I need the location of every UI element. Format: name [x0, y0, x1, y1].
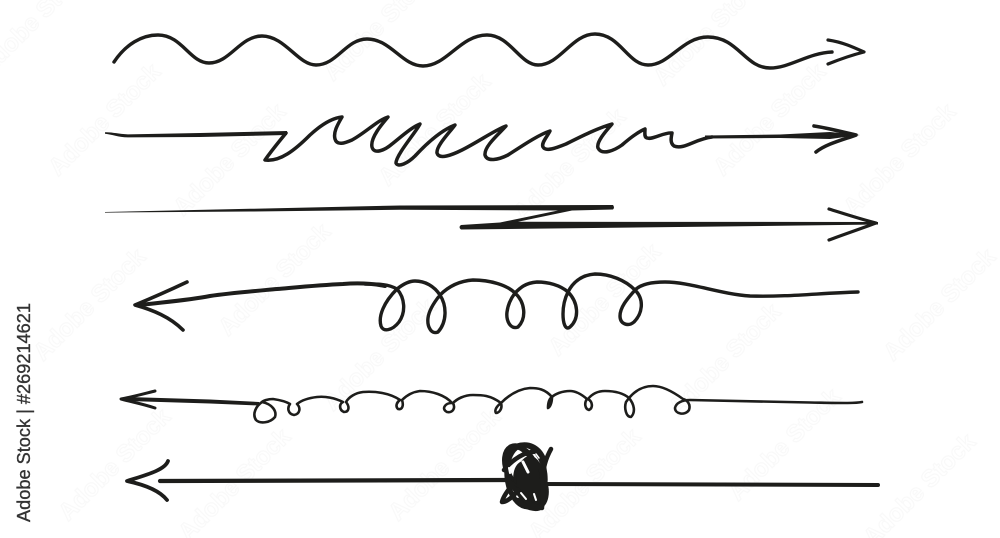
side credit text: Adobe Stock | #269214621 — [14, 303, 34, 522]
watermark pattern: Adobe Stock — [318, 293, 442, 416]
watermark pattern: Adobe Stock — [723, 383, 847, 506]
watermark pattern: Adobe Stock — [373, 68, 497, 191]
watermark pattern: Adobe Stock — [543, 238, 667, 361]
arrow 6: straight line with knot pointing left — [127, 441, 878, 511]
watermark pattern: Adobe Stock — [53, 403, 177, 526]
watermark pattern: Adobe Stock — [708, 58, 832, 181]
watermark pattern: Adobe Stock — [28, 243, 152, 366]
arrow 2: zigzag scribble pointing right — [105, 117, 860, 165]
watermark pattern: Adobe Stock — [663, 298, 787, 421]
watermark pattern: Adobe Stock — [213, 218, 337, 341]
watermark pattern: Adobe Stock — [168, 98, 292, 221]
arrow 5: small loops pointing left — [120, 386, 862, 422]
watermark pattern: Adobe Stock — [383, 403, 507, 526]
watermark pattern: Adobe Stock — [838, 98, 962, 221]
watermark pattern: Adobe Stock — [878, 243, 1000, 366]
arrow 1: wavy line pointing right — [114, 34, 864, 68]
watermark pattern: Adobe Stock — [508, 103, 632, 226]
arrow 4: large loops pointing left — [135, 274, 858, 333]
scribble knot — [499, 441, 552, 511]
arrow 3: broken double line pointing right — [105, 205, 878, 240]
watermark pattern: Adobe Stock — [43, 58, 167, 181]
